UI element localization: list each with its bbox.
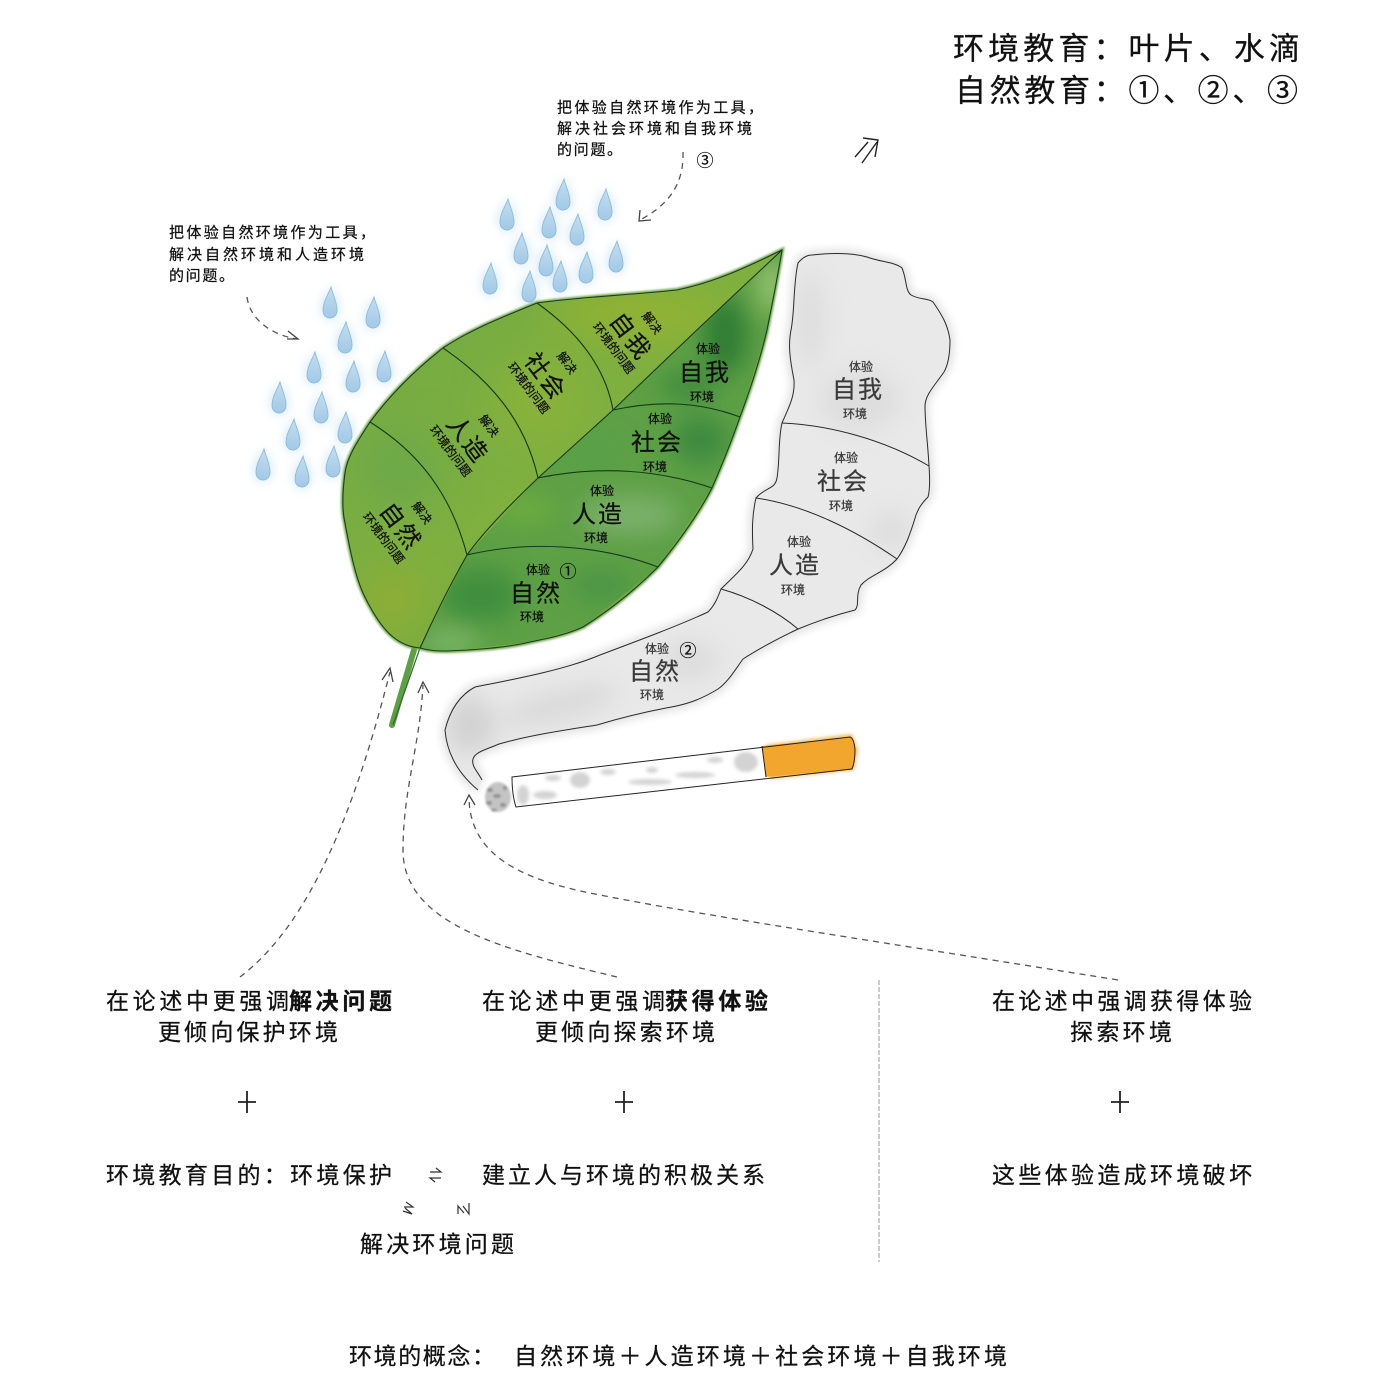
callout: left annotation about tools: 的问题。 — [169, 268, 234, 284]
panel: problem-solving column text: 在论述中更强调 — [106, 988, 289, 1014]
arrow: dashed from upper annotation to raindrops — [639, 152, 683, 221]
panel: experience column text: 获得体验 — [665, 988, 768, 1014]
panel: right column text — [992, 988, 1252, 1045]
smoke label: experience self environment: 环境 — [843, 406, 867, 421]
leaf label: experience self environment: 自我 — [679, 360, 731, 386]
text: solve environmental problems: 解决环境问题 — [360, 1231, 514, 1257]
icon: equilibrium arrows left diagonal — [403, 1202, 413, 1214]
arrow: dashed from right text to cigarette tip — [464, 795, 1118, 980]
text: concept of environment: 环境的概念： — [349, 1343, 495, 1369]
leaf label: solve natural environment problems: 环境的问题 — [360, 509, 408, 566]
leaf label: solve self environment problems: 解决 — [639, 309, 665, 337]
text: concept of environment: 自然环境＋人造环境＋社会环境＋自我环境 — [514, 1343, 1007, 1369]
text: build positive relationship: 建立人与环境的积极关系 — [482, 1162, 765, 1188]
leaf label: experience nature, marker 1: 自然 — [510, 580, 562, 608]
leaf label: experience built environment: 体验 — [590, 483, 614, 498]
arrow: dashed from experience text to leaf — [403, 682, 617, 977]
panel: problem-solving column text — [106, 988, 392, 1045]
leaf label: experience built environment: 环境 — [584, 530, 608, 545]
icon: cigarette smoke body — [440, 250, 960, 810]
leaf label: experience nature, marker 1: ① — [560, 562, 576, 582]
leaf label: solve self environment problems: 环境的问题 — [590, 319, 638, 376]
smoke label: experience social environment: 体验 — [834, 450, 858, 465]
smoke label: experience built environment: 体验 — [787, 534, 811, 549]
callout: left annotation about tools: 解决自然环境和人造环境 — [169, 246, 364, 264]
smoke label: experience self environment — [832, 359, 884, 421]
icon: cigarette — [485, 734, 858, 812]
leaf label: experience social environment: 体验 — [648, 411, 672, 426]
smoke label: experience nature, marker 2: 体验 — [645, 641, 669, 656]
leaf label: solve natural environment problems — [360, 482, 444, 566]
leaf label: solve built environment problems: 人造 — [441, 411, 493, 469]
callout: upper annotation about tools — [557, 98, 763, 170]
smoke label: experience built environment — [769, 534, 821, 597]
smoke label: experience built environment: 环境 — [781, 582, 805, 597]
leaf label: solve social environment problems: 解决 — [554, 349, 580, 377]
callout: left annotation about tools — [169, 224, 375, 284]
icon: right raindrop cluster — [483, 179, 623, 302]
callout: left annotation about tools: 把体验自然环境作为工具， — [169, 224, 375, 242]
leaf label: experience built environment — [572, 483, 624, 545]
arrow: dashed from problem-solving text to leaf — [240, 668, 393, 977]
leaf label: experience built environment: 人造 — [572, 502, 624, 528]
icon: hollow double arrow pointing up-right — [855, 138, 878, 163]
panel: experience column text: 在论述中更强调 — [482, 988, 665, 1014]
title: education legend — [953, 32, 1300, 108]
icon: plus sign left — [238, 1091, 256, 1113]
title: education legend: 自然教育：①、②、③ — [955, 74, 1298, 108]
callout: upper annotation about tools: 解决社会环境和自我环境 — [557, 120, 752, 138]
leaf label: experience self environment — [679, 341, 731, 404]
leaf label: solve social environment problems — [505, 332, 589, 416]
leaf label: experience nature, marker 1 — [510, 562, 576, 624]
leaf label: experience social environment — [631, 411, 683, 474]
leaf label: experience nature, marker 1: 环境 — [520, 609, 544, 624]
leaf label: solve social environment problems: 社会 — [519, 348, 571, 406]
icon: left raindrop cluster — [256, 287, 391, 487]
panel: problem-solving column text: 解决问题 — [289, 988, 392, 1014]
smoke label: experience self environment: 自我 — [832, 376, 884, 404]
leaf label: solve self environment problems: 自我 — [604, 308, 656, 366]
icon: plus sign right — [1111, 1091, 1129, 1113]
leaf label: experience social environment: 社会 — [631, 430, 683, 456]
smoke label: experience self environment: 体验 — [849, 359, 873, 374]
smoke label: experience nature, marker 2 — [629, 641, 696, 702]
arrow: dashed from left annotation to raindrops — [247, 297, 298, 339]
smoke label: experience social environment: 社会 — [817, 468, 869, 496]
callout: upper annotation about tools: ③ — [696, 152, 714, 170]
leaf label: experience self environment: 体验 — [696, 341, 720, 356]
icon: leaf stem — [392, 648, 420, 725]
leaf label: solve built environment problems: 解决 — [476, 412, 502, 440]
panel: right column text: 探索环境 — [1070, 1019, 1172, 1045]
callout: upper annotation about tools: 把体验自然环境作为工具， — [557, 98, 763, 116]
panel: experience column text: 更倾向探索环境 — [535, 1019, 715, 1045]
leaf label: solve natural environment problems: 自然 — [374, 498, 426, 556]
panel: experience column text — [482, 988, 768, 1045]
callout: upper annotation about tools: 的问题。 — [557, 142, 622, 158]
divider: vertical dashed line — [878, 980, 880, 1262]
leaf label: experience social environment: 环境 — [643, 459, 667, 474]
smoke label: experience social environment: 环境 — [829, 498, 853, 513]
leaf label: solve natural environment problems: 解决 — [409, 499, 435, 527]
panel: right column text: 在论述中强调获得体验 — [992, 988, 1252, 1014]
leaf: watercolor body with veins — [330, 240, 800, 660]
smoke label: experience nature, marker 2: 自然 — [629, 658, 681, 686]
leaf label: experience nature, marker 1: 体验 — [526, 562, 550, 577]
leaf label: experience self environment: 环境 — [690, 389, 714, 404]
title: education legend: 环境教育：叶片、水滴 — [953, 32, 1300, 66]
smoke label: experience social environment — [817, 450, 869, 513]
leaf label: solve built environment problems — [427, 395, 511, 479]
text: experience causes damage: 这些体验造成环境破坏 — [992, 1162, 1252, 1188]
smoke label: experience built environment: 人造 — [769, 552, 821, 580]
leaf label: solve self environment problems — [590, 292, 674, 376]
smoke label: experience nature, marker 2: 环境 — [640, 687, 664, 702]
icon: equilibrium arrows right diagonal — [458, 1203, 469, 1214]
icon: plus sign middle — [615, 1091, 633, 1113]
text: environmental education purpose: 环境教育目的：环境保护 — [106, 1162, 392, 1188]
leaf label: solve built environment problems: 环境的问题 — [427, 422, 475, 479]
icon: equilibrium arrows between goals — [430, 1168, 441, 1182]
smoke label: experience nature, marker 2: ② — [680, 642, 696, 660]
panel: problem-solving column text: 更倾向保护环境 — [158, 1019, 338, 1045]
leaf label: solve social environment problems: 环境的问题 — [505, 359, 553, 416]
